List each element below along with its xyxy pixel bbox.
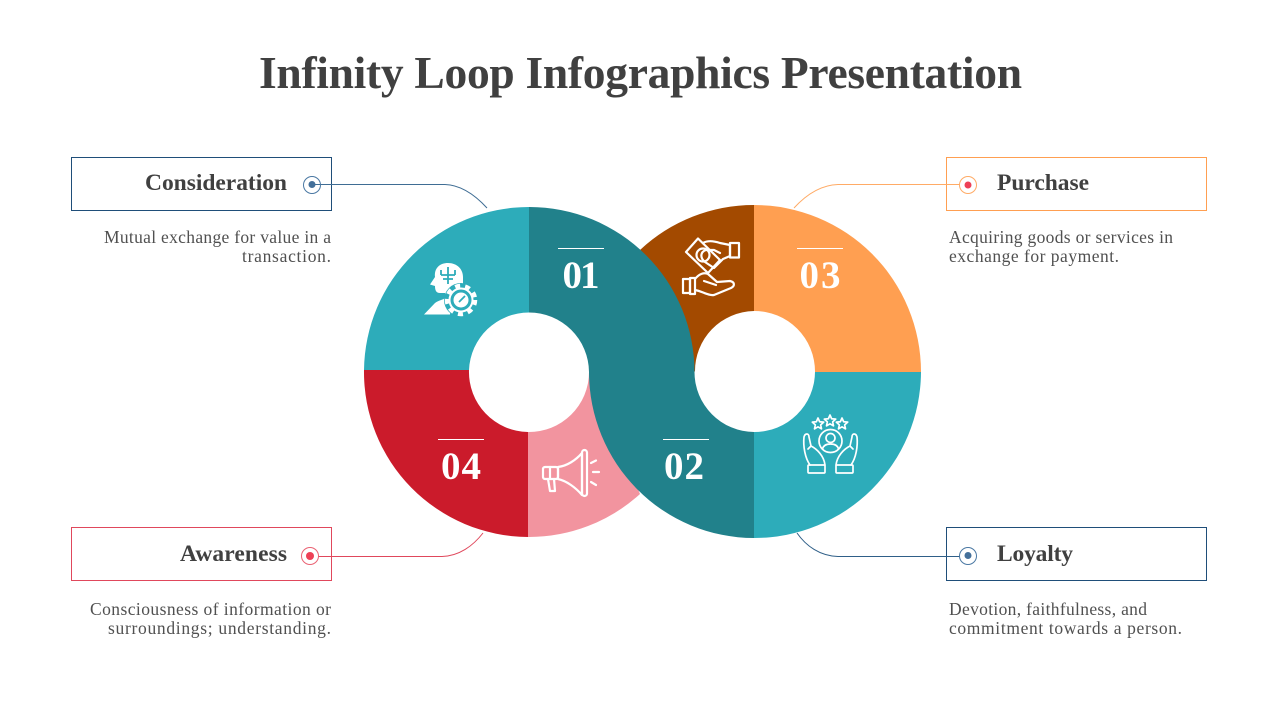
callout: consideration	[72, 158, 487, 210]
text: loyalty description: Devotion, faithfulness, and	[949, 599, 1147, 619]
text: awareness description: Consciousness of information or	[90, 599, 331, 619]
icon: handshake money	[683, 238, 739, 295]
segment: awareness light quadrant	[528, 372, 640, 537]
callout: purchase	[794, 158, 1206, 210]
segment: loyalty quadrant	[754, 372, 921, 538]
callout: consideration: Consideration	[145, 170, 287, 196]
icon: megaphone	[543, 450, 599, 496]
text: purchase description: Acquiring goods or services in	[949, 227, 1173, 247]
callout: awareness: Awareness	[180, 541, 287, 567]
number 01: 01	[562, 254, 600, 297]
callout: purchase: Purchase	[997, 170, 1089, 196]
text: awareness description	[90, 599, 331, 638]
segment: consideration quadrant	[364, 207, 529, 370]
callout: loyalty: Loyalty	[997, 541, 1073, 567]
icon: hands with person and stars	[804, 415, 857, 473]
segment: purchase quadrant	[754, 205, 921, 372]
icon: head with gear	[424, 263, 478, 317]
number 04: 04	[441, 445, 481, 488]
text: purchase description: exchange for payment.	[949, 246, 1119, 266]
number 02: 02	[664, 445, 704, 488]
text: consideration description	[104, 227, 331, 266]
segment: purchase dark quadrant	[640, 205, 754, 372]
callout: loyalty	[797, 528, 1206, 580]
number 03: 03	[800, 254, 840, 297]
text: consideration description: Mutual exchange for value in a	[104, 227, 331, 247]
segment: awareness quadrant	[364, 370, 528, 537]
text: consideration description: transaction.	[242, 246, 331, 266]
infinity loop diagram	[364, 205, 921, 538]
segment: crossing band	[529, 207, 754, 538]
text: loyalty description	[949, 599, 1182, 638]
text: purchase description	[949, 227, 1173, 266]
title: Infinity Loop Infographics Presentation	[259, 47, 1022, 98]
callout: awareness	[72, 528, 483, 580]
text: awareness description: surroundings; understanding.	[108, 618, 331, 638]
text: loyalty description: commitment towards a person.	[949, 618, 1182, 638]
